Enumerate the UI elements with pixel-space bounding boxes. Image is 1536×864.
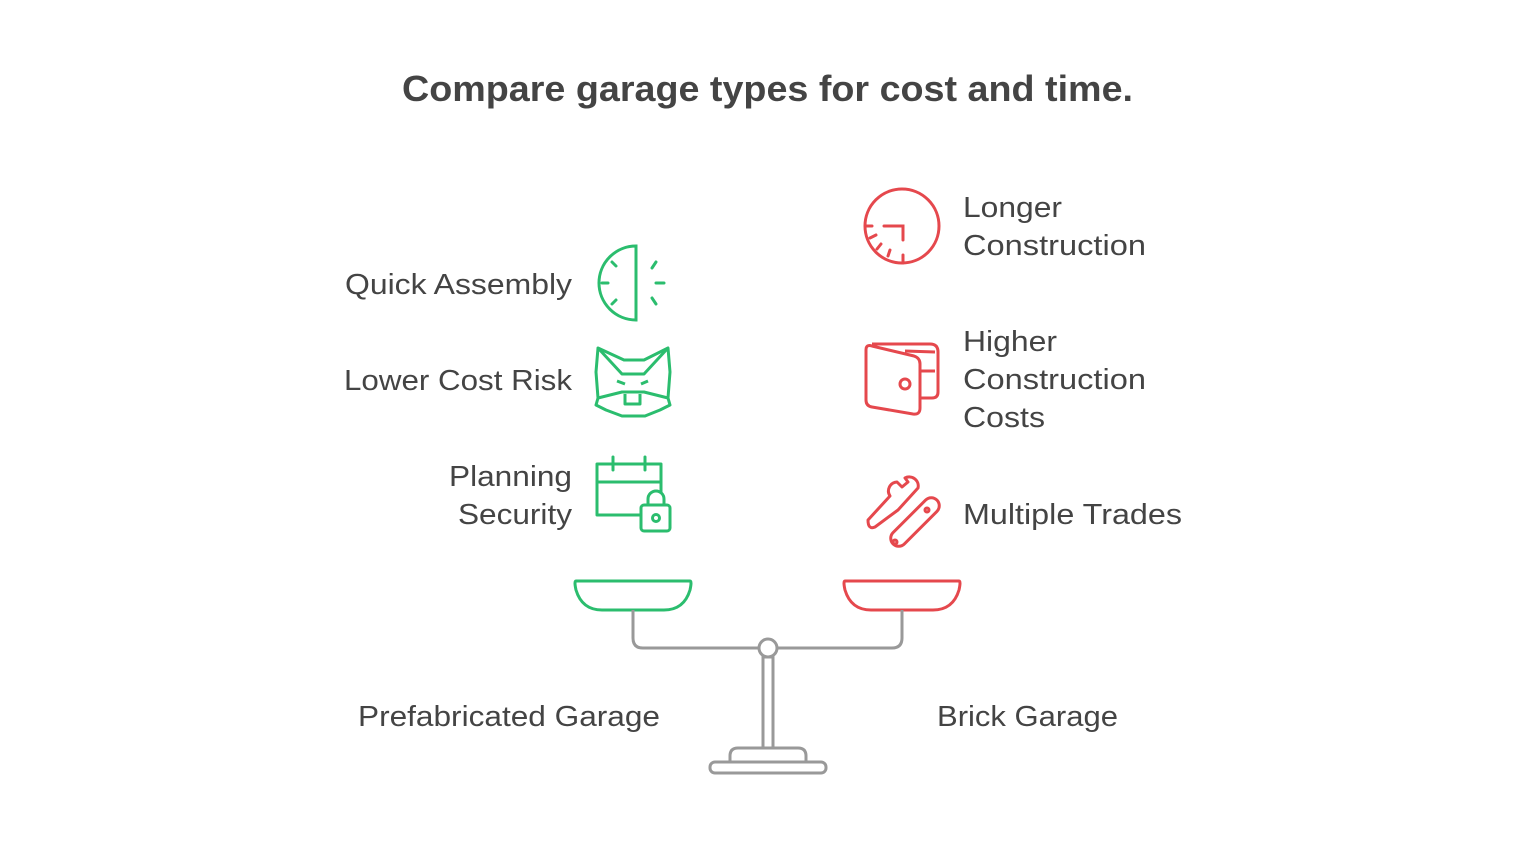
- icon: clock (longer construction): [865, 189, 939, 263]
- title: Compare garage types for cost and time.: [402, 68, 1133, 109]
- beam: [633, 610, 902, 648]
- label: Longer Construction: [963, 192, 1146, 262]
- label: Planning Security: Planning: [449, 461, 572, 493]
- label: Brick Garage: Brick Garage: [937, 701, 1118, 733]
- icon: calendar with lock (planning security): [597, 457, 670, 531]
- label: Higher Construction Costs: Higher: [963, 326, 1057, 358]
- scale: [575, 581, 960, 773]
- label: Higher Construction Costs: [963, 326, 1146, 434]
- label: Prefabricated Garage: Prefabricated Garage: [358, 701, 660, 733]
- label: Longer Construction: Construction: [963, 230, 1146, 262]
- label: Quick Assembly: Quick Assembly: [345, 269, 573, 301]
- label: Planning Security: [449, 461, 573, 531]
- icon: tools (multiple trades): [868, 477, 943, 550]
- pan: prefabricated (green): [575, 581, 691, 610]
- label: Lower Cost Risk: Lower Cost Risk: [344, 365, 573, 397]
- label: Multiple Trades: Multiple Trades: [963, 499, 1182, 531]
- label: Planning Security: Security: [458, 499, 573, 531]
- post and base: [710, 639, 826, 773]
- icon: fox (lower cost risk): [596, 348, 670, 416]
- label: Longer Construction: Longer: [963, 192, 1062, 224]
- label: Higher Construction Costs: Construction: [963, 364, 1146, 396]
- icon: half clock (quick assembly): [599, 246, 664, 320]
- icon: wallet (higher costs): [866, 344, 938, 414]
- pan: brick (red): [844, 581, 960, 610]
- label: Higher Construction Costs: Costs: [963, 402, 1045, 434]
